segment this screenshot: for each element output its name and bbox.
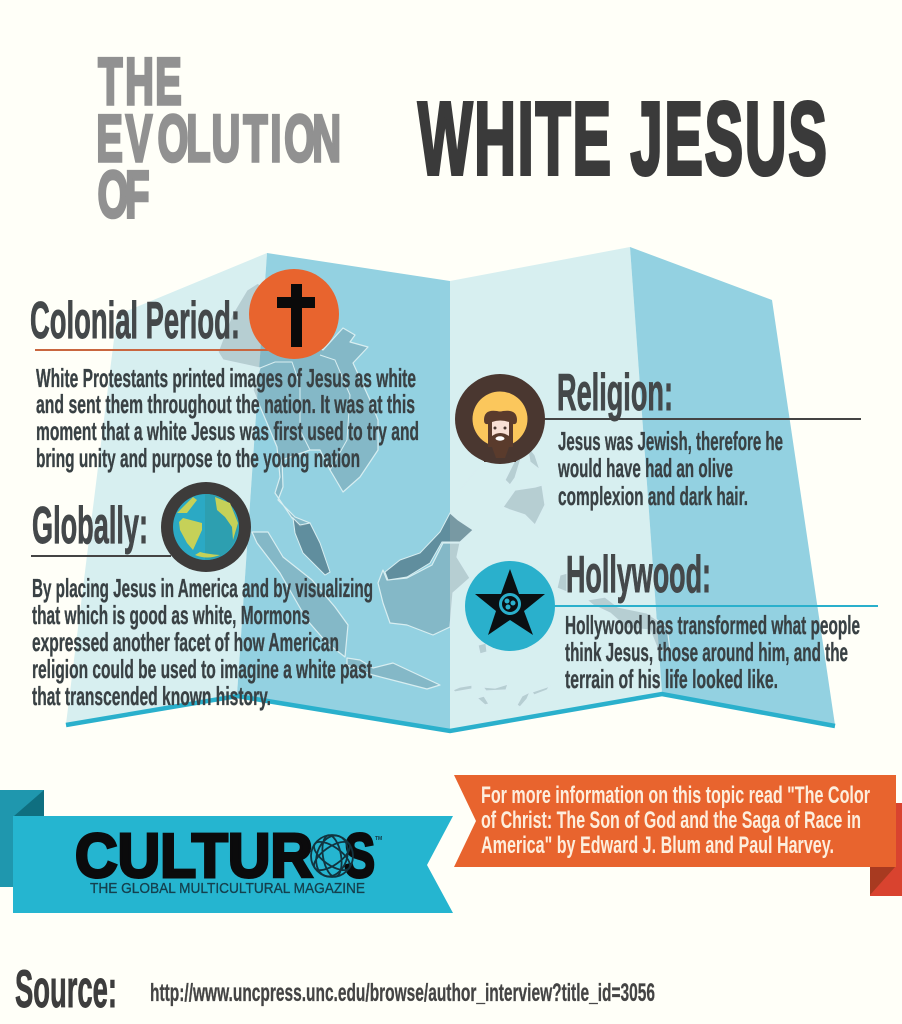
title: the evolution of: OF xyxy=(98,158,149,232)
title: the evolution of: THE xyxy=(98,45,182,119)
text: globally body: that which is good as white, Mormons xyxy=(32,600,310,630)
title: the evolution of: EVOLUTION xyxy=(96,102,341,176)
panel: globally xyxy=(31,482,373,711)
title: white jesus: WHITE JESUS xyxy=(418,80,827,196)
map interior borders xyxy=(260,355,478,490)
text: globally body: By placing Jesus in America and by visualizing xyxy=(32,573,373,603)
folded map illustration xyxy=(66,247,835,731)
text: further reading xyxy=(481,782,870,859)
banner: further reading ribbon xyxy=(454,775,902,896)
banner: culturas ribbon xyxy=(0,790,453,913)
text: colonial body xyxy=(36,363,419,473)
heading: religion: Religion: xyxy=(557,364,673,422)
logo: cultures: CULTUR xyxy=(75,822,313,891)
panel: hollywood xyxy=(465,546,878,694)
icon: star xyxy=(465,561,555,651)
map land masses xyxy=(218,283,670,707)
map bottom edge xyxy=(66,694,835,731)
heading: globally: Globally: xyxy=(32,497,148,555)
text: colonial body: moment that a white Jesus was first used to try and xyxy=(36,416,419,446)
source label: Source: xyxy=(15,960,117,1019)
heading: hollywood: Hollywood: xyxy=(566,546,711,604)
logo: cultures: S xyxy=(344,822,375,891)
map dark land xyxy=(293,513,473,580)
logo: cultures: TM xyxy=(375,836,382,842)
icon: jesus face xyxy=(455,374,545,464)
text: globally body: expressed another facet of how American xyxy=(32,627,339,657)
panel: religion xyxy=(455,364,861,511)
heading: colonial period: Colonial Period: xyxy=(30,292,240,350)
text: religion body xyxy=(557,426,783,511)
icon: cross xyxy=(249,269,339,359)
text: globally body: that transcended known history. xyxy=(32,681,271,711)
text: colonial body: and sent them throughout the nation. It was at this xyxy=(36,389,415,419)
logo globe xyxy=(310,831,354,881)
text: hollywood body xyxy=(565,610,860,694)
title: the evolution of xyxy=(96,45,341,232)
text: colonial body: bring unity and purpose to the young nation xyxy=(36,443,360,473)
text: globally body xyxy=(32,573,373,711)
logo tagline: THE GLOBAL MULTICULTURAL MAGAZINE xyxy=(90,880,365,897)
panel: colonial period xyxy=(30,269,419,473)
text: religion body: would have had an olive xyxy=(557,453,733,483)
text: religion body: complexion and dark hair. xyxy=(558,481,748,511)
text: colonial body: White Protestants printed images of Jesus as white xyxy=(36,363,416,393)
icon: globe xyxy=(161,482,251,572)
text: globally body: religion could be used to imagine a white past xyxy=(32,654,372,684)
